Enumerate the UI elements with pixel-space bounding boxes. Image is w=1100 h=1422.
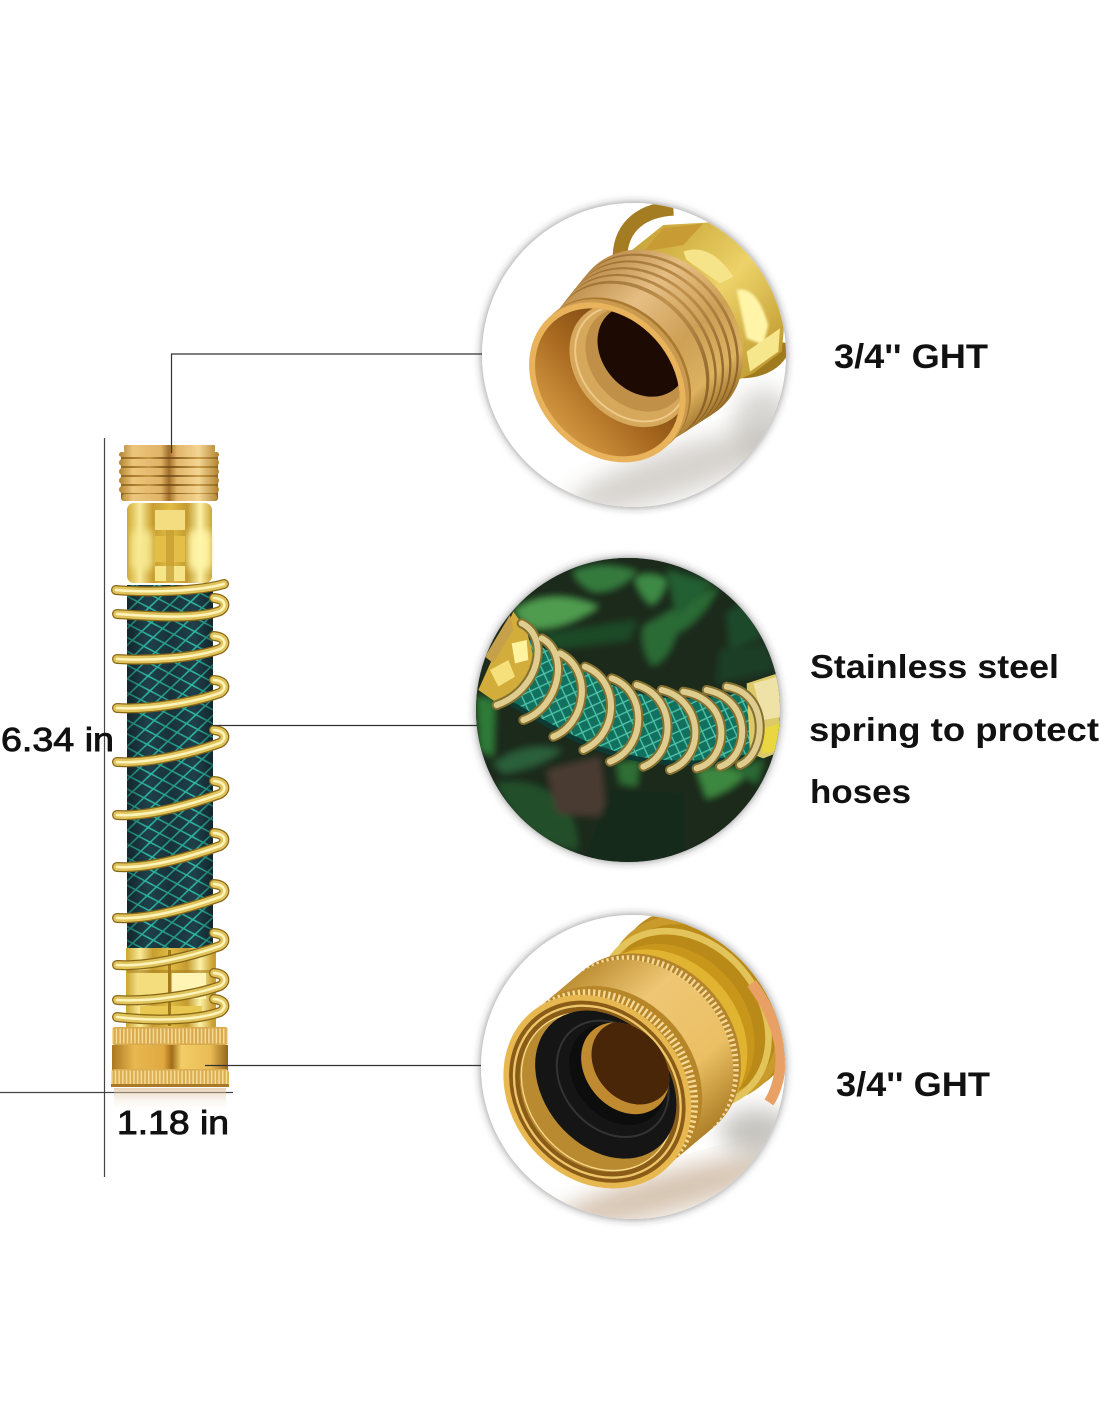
nut body, gasket and bore bbox=[503, 916, 785, 1188]
leader line: male thread bbox=[172, 354, 484, 453]
spring and collar behind nut bbox=[634, 916, 785, 1084]
label: spring description: Stainless steel bbox=[810, 648, 1059, 685]
brass swivel nut bbox=[111, 1027, 229, 1087]
label: width dimension: 1.18 in bbox=[117, 1104, 229, 1141]
label: spring description bbox=[809, 648, 1099, 810]
nut reflection bbox=[114, 1088, 226, 1112]
orange spring highlight bbox=[752, 983, 781, 1102]
rubber gasket bbox=[535, 1010, 676, 1159]
hose body bbox=[503, 660, 780, 730]
back knurl bbox=[573, 971, 714, 1136]
dimension line: width bbox=[0, 1092, 233, 1094]
dimension line: height bbox=[104, 438, 106, 1177]
circle callout: spring on hose bbox=[470, 550, 790, 870]
label: spring description: spring to protect bbox=[809, 711, 1099, 748]
polished upper collar bbox=[127, 503, 212, 583]
label: bottom thread size: 3/4'' GHT bbox=[836, 1066, 990, 1104]
foliage background bbox=[470, 550, 790, 870]
spring rings bbox=[497, 623, 760, 770]
threads and bore bbox=[529, 250, 743, 462]
label: spring description: hoses bbox=[810, 773, 911, 810]
floor shadow bbox=[559, 1146, 762, 1219]
floor shadow bbox=[568, 424, 766, 507]
left fitting bbox=[478, 612, 532, 701]
label: top thread size: 3/4'' GHT bbox=[834, 338, 988, 376]
right fitting bbox=[746, 674, 780, 758]
leader line: spring bbox=[213, 724, 478, 726]
back spring bbox=[620, 208, 673, 255]
leader line: swivel nut bbox=[205, 1064, 482, 1066]
label: height dimension: 6.34 in bbox=[1, 721, 114, 758]
front knurl bbox=[539, 989, 698, 1166]
polished lower collar bbox=[126, 948, 216, 1028]
green braided hose bbox=[127, 585, 213, 951]
circle callout: swivel nut bbox=[474, 908, 792, 1226]
bore bbox=[581, 1022, 670, 1114]
smooth band bbox=[542, 960, 734, 1162]
polished collar bbox=[630, 222, 785, 382]
male threaded end bbox=[119, 445, 219, 501]
spring coil bbox=[116, 584, 224, 1020]
product: full hose protector bbox=[111, 445, 229, 1112]
circle callout: male thread bbox=[482, 203, 793, 529]
